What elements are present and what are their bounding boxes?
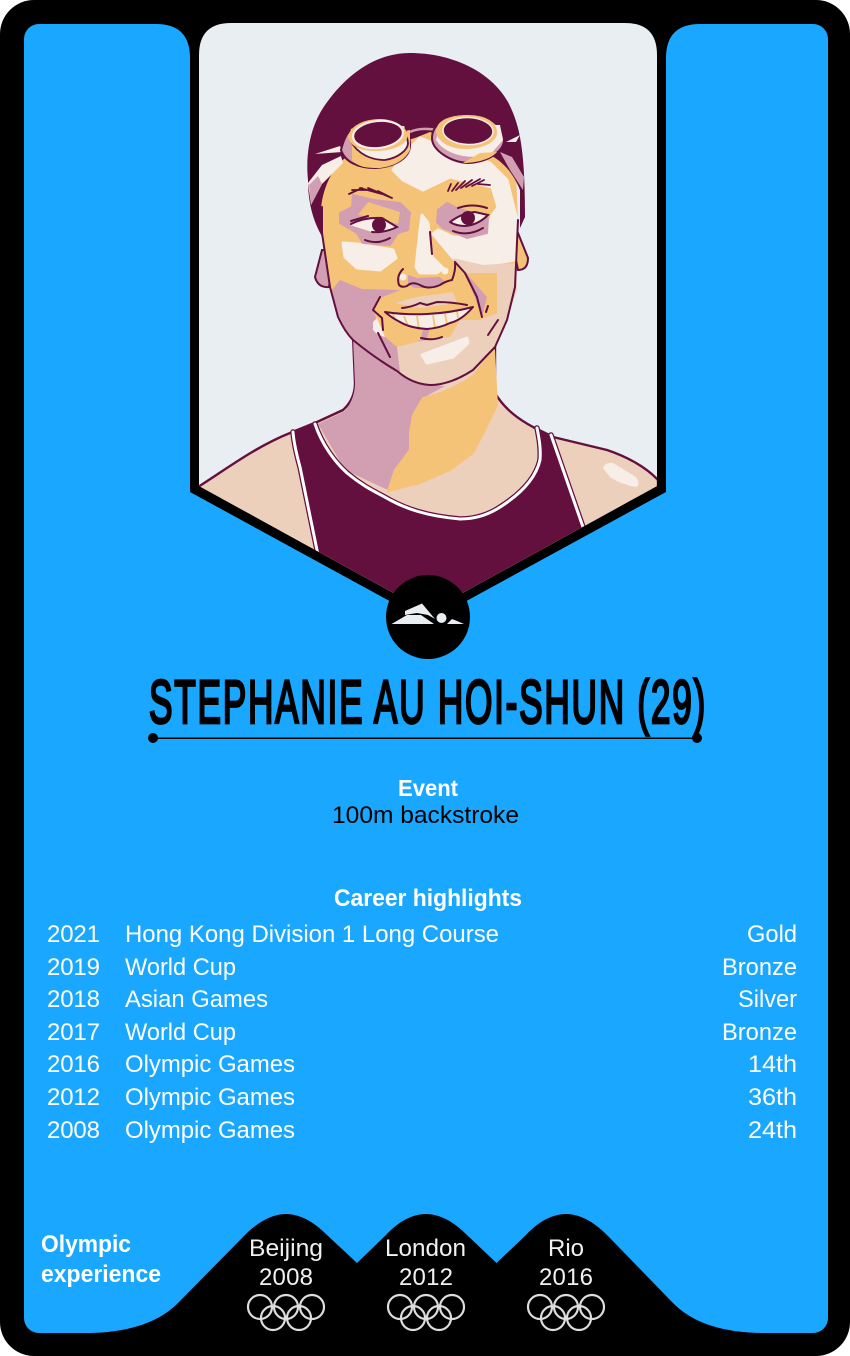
- portrait panel: swimmer illustration: [198, 23, 658, 620]
- shoulder highlight: [603, 463, 638, 487]
- eyebrows: [349, 179, 490, 198]
- goggle straps: [315, 135, 520, 154]
- side cap bands: [308, 152, 524, 205]
- face and mouth linework: [322, 207, 518, 385]
- swimming icon badge: [386, 575, 470, 659]
- yellow inset above left eye: [358, 202, 400, 224]
- chin highlight: [422, 338, 468, 363]
- career highlights table: 2016: [47, 1051, 100, 1078]
- games: London 2012: 2012: [399, 1264, 453, 1291]
- tank top: [295, 425, 585, 593]
- career highlights table: Gold: [747, 921, 797, 948]
- career highlights table: 14th: [748, 1051, 797, 1078]
- dimple highlight: [373, 318, 385, 337]
- games: London 2012: London: [385, 1235, 466, 1262]
- shoulders and neck: [199, 340, 657, 593]
- forehead and cheek highlight: [343, 138, 517, 273]
- neck shading yellow: [388, 350, 497, 491]
- career highlights table: [47, 921, 797, 1144]
- olympic experience label: [41, 1231, 161, 1288]
- career highlights table: Asian Games: [125, 986, 268, 1013]
- career highlights heading: Career highlights: [334, 885, 522, 912]
- olympic experience label: Olympic: [41, 1231, 131, 1258]
- event block: [332, 775, 519, 829]
- right goggle: [432, 115, 504, 163]
- portrait frame: [156, 24, 700, 622]
- career highlights table: Olympic Games: [125, 1117, 295, 1144]
- left goggle: [341, 118, 410, 168]
- career highlights table: 2017: [47, 1019, 100, 1046]
- lower face peach: [397, 258, 517, 385]
- nasolabial lavender: [466, 274, 487, 314]
- games: Beijing 2008: [248, 1235, 324, 1330]
- games: London 2012: [385, 1235, 466, 1330]
- olympic experience mountains: [85, 1214, 765, 1340]
- career highlights table: Olympic Games: [125, 1084, 295, 1111]
- games: Beijing 2008: 2008: [259, 1264, 313, 1291]
- name underline: [148, 733, 702, 743]
- right eye: [450, 206, 488, 233]
- left cheek highlight: [343, 243, 396, 270]
- career highlights table: Olympic Games: [125, 1051, 295, 1078]
- face base: [320, 120, 518, 385]
- eye shadows: [340, 195, 488, 245]
- games: Beijing 2008: Beijing: [249, 1235, 323, 1262]
- teeth: [388, 308, 470, 328]
- career highlights table: 24th: [748, 1117, 797, 1144]
- tooth gaps: [392, 311, 458, 329]
- left eye: [350, 216, 397, 242]
- swimmer pictogram: [392, 604, 464, 624]
- career highlights table: Bronze: [722, 954, 797, 981]
- neck shading lavender: [318, 338, 445, 490]
- career highlights table: Hong Kong Division 1 Long Course: [125, 921, 499, 948]
- career highlights table: World Cup: [125, 954, 236, 981]
- games: Rio 2016: 2016: [539, 1264, 593, 1291]
- games: Rio 2016: [528, 1235, 604, 1330]
- goggle bridge: [408, 129, 437, 133]
- event block: Event: [398, 775, 458, 801]
- nose highlight: [416, 215, 443, 273]
- career highlights table: 2018: [47, 986, 100, 1013]
- career highlights table: 2008: [47, 1117, 100, 1144]
- goggles: [341, 115, 504, 168]
- event block: 100m backstroke: [332, 802, 519, 829]
- career highlights table: 2021: [47, 921, 100, 948]
- yellow inset above right eye: [460, 208, 490, 218]
- career highlights table: 36th: [748, 1084, 797, 1111]
- olympic experience label: experience: [41, 1261, 161, 1288]
- career highlights table: Silver: [738, 986, 797, 1013]
- career highlights table: World Cup: [125, 1019, 236, 1046]
- under-nose shading and nose spots: [400, 268, 448, 288]
- lower face lavender shading: [332, 280, 430, 372]
- career highlights table: Bronze: [722, 1019, 797, 1046]
- games: Rio 2016: Rio: [548, 1235, 584, 1262]
- tank top trim: [293, 424, 583, 555]
- career highlights table: 2019: [47, 954, 100, 981]
- upper lip shading: [395, 292, 457, 308]
- swim cap: [307, 53, 525, 238]
- ears: [315, 233, 528, 287]
- career highlights table: 2012: [47, 1084, 100, 1111]
